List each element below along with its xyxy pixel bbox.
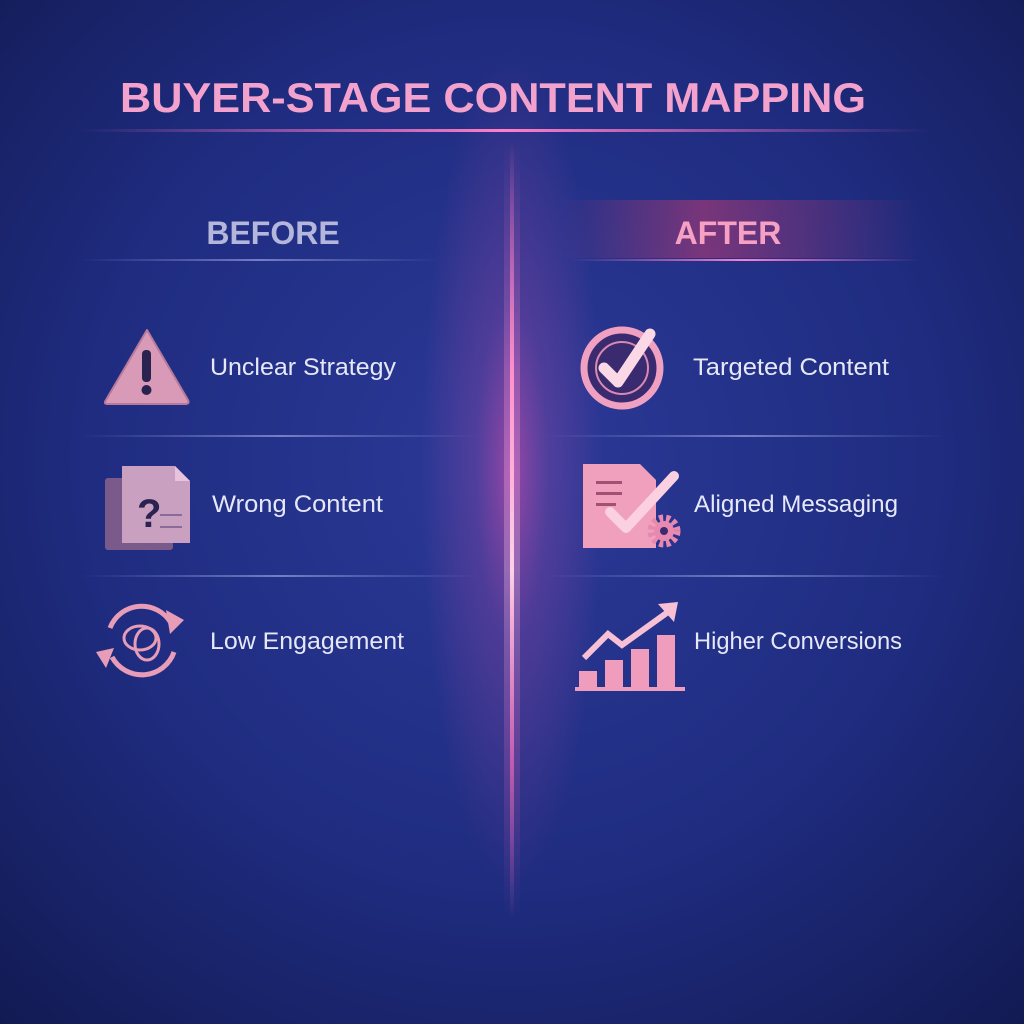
icon: circular arrows — [110, 606, 174, 675]
item: wrong content: Wrong Content — [212, 491, 383, 518]
heading: after: AFTER — [675, 215, 781, 251]
heading: before: BEFORE — [206, 215, 340, 251]
icon: document check gear — [583, 464, 677, 548]
item: low engagement: Low Engagement — [210, 628, 404, 655]
item: aligned messaging: Aligned Messaging — [694, 491, 898, 518]
item: targeted content: Targeted Content — [693, 354, 889, 381]
item: aligned messaging — [583, 464, 898, 548]
item: targeted content — [584, 330, 889, 406]
title: BUYER-STAGE CONTENT MAPPING — [120, 74, 866, 121]
icon: document question — [105, 466, 190, 550]
icon: check circle — [584, 330, 660, 406]
icon: bar chart growth — [575, 602, 685, 691]
item: wrong content — [105, 466, 383, 550]
item: higher conversions — [575, 602, 902, 691]
item: higher conversions: Higher Conversions — [694, 628, 902, 655]
heading: after — [560, 200, 920, 261]
title — [80, 74, 930, 132]
center divider glow line — [504, 140, 520, 920]
item: low engagement — [96, 606, 404, 675]
item: unclear strategy — [105, 330, 396, 404]
icon: document question: ? — [137, 492, 161, 536]
item: unclear strategy: Unclear Strategy — [210, 354, 396, 381]
icon: warning — [105, 330, 189, 404]
